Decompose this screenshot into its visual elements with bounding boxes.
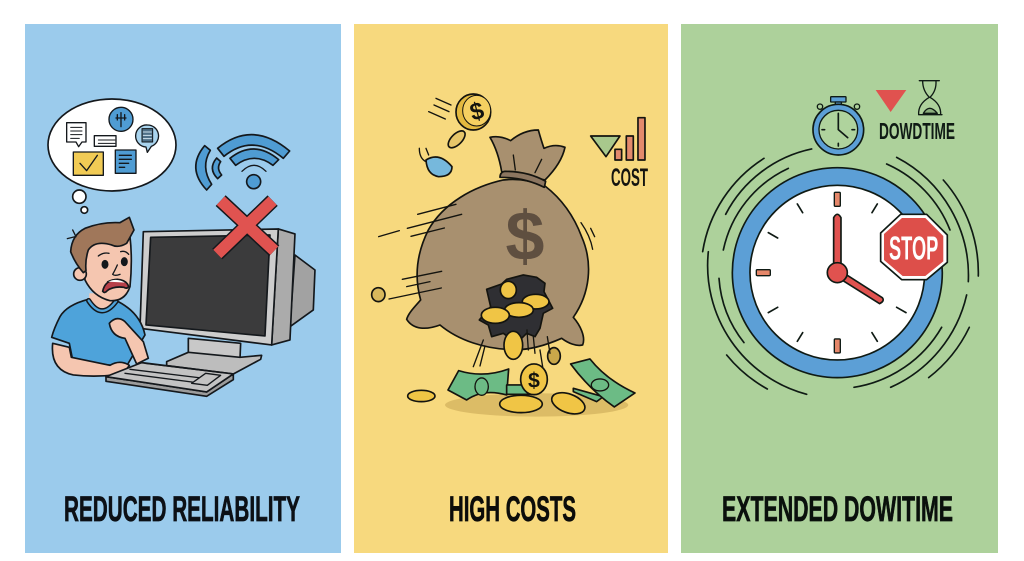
panel: reduced reliability xyxy=(25,24,341,553)
cost mini chart xyxy=(591,118,645,160)
cash and coins pile: $ xyxy=(528,368,540,392)
cash and coins pile xyxy=(408,359,635,418)
monitor xyxy=(140,229,315,374)
thought bubble xyxy=(48,99,176,213)
stop sign: STOP xyxy=(889,230,938,267)
icon: hourglass xyxy=(919,81,942,115)
money bag xyxy=(407,130,628,417)
icon: red triangle xyxy=(876,90,906,112)
icon: red cross xyxy=(217,201,274,254)
money bag: $ xyxy=(506,197,544,275)
label: downtime mini: DOWDTIME xyxy=(879,118,955,144)
illustration: frustrated user at computer xyxy=(48,99,315,396)
keyboard xyxy=(106,363,233,396)
icon: stopwatch xyxy=(813,97,864,155)
panel: extended downtime xyxy=(681,24,998,553)
panel: high costs xyxy=(354,24,668,553)
motion arcs xyxy=(703,149,978,394)
icon: wifi signal xyxy=(196,135,290,190)
hole with coins xyxy=(479,275,560,364)
label: cost: COST xyxy=(611,164,648,192)
falling coins and bird coin xyxy=(372,94,491,302)
heading: high costs: HIGH COSTS xyxy=(449,490,576,529)
stop sign xyxy=(881,214,947,280)
heading: reduced reliability: REDUCED RELIABILITY xyxy=(64,490,300,529)
falling coins and bird coin: $ xyxy=(467,97,487,127)
person xyxy=(52,217,148,376)
clock face xyxy=(732,168,942,378)
illustration: clock with stop sign xyxy=(703,81,978,394)
speed lines xyxy=(379,98,595,367)
illustration: leaking money bag xyxy=(372,94,645,418)
